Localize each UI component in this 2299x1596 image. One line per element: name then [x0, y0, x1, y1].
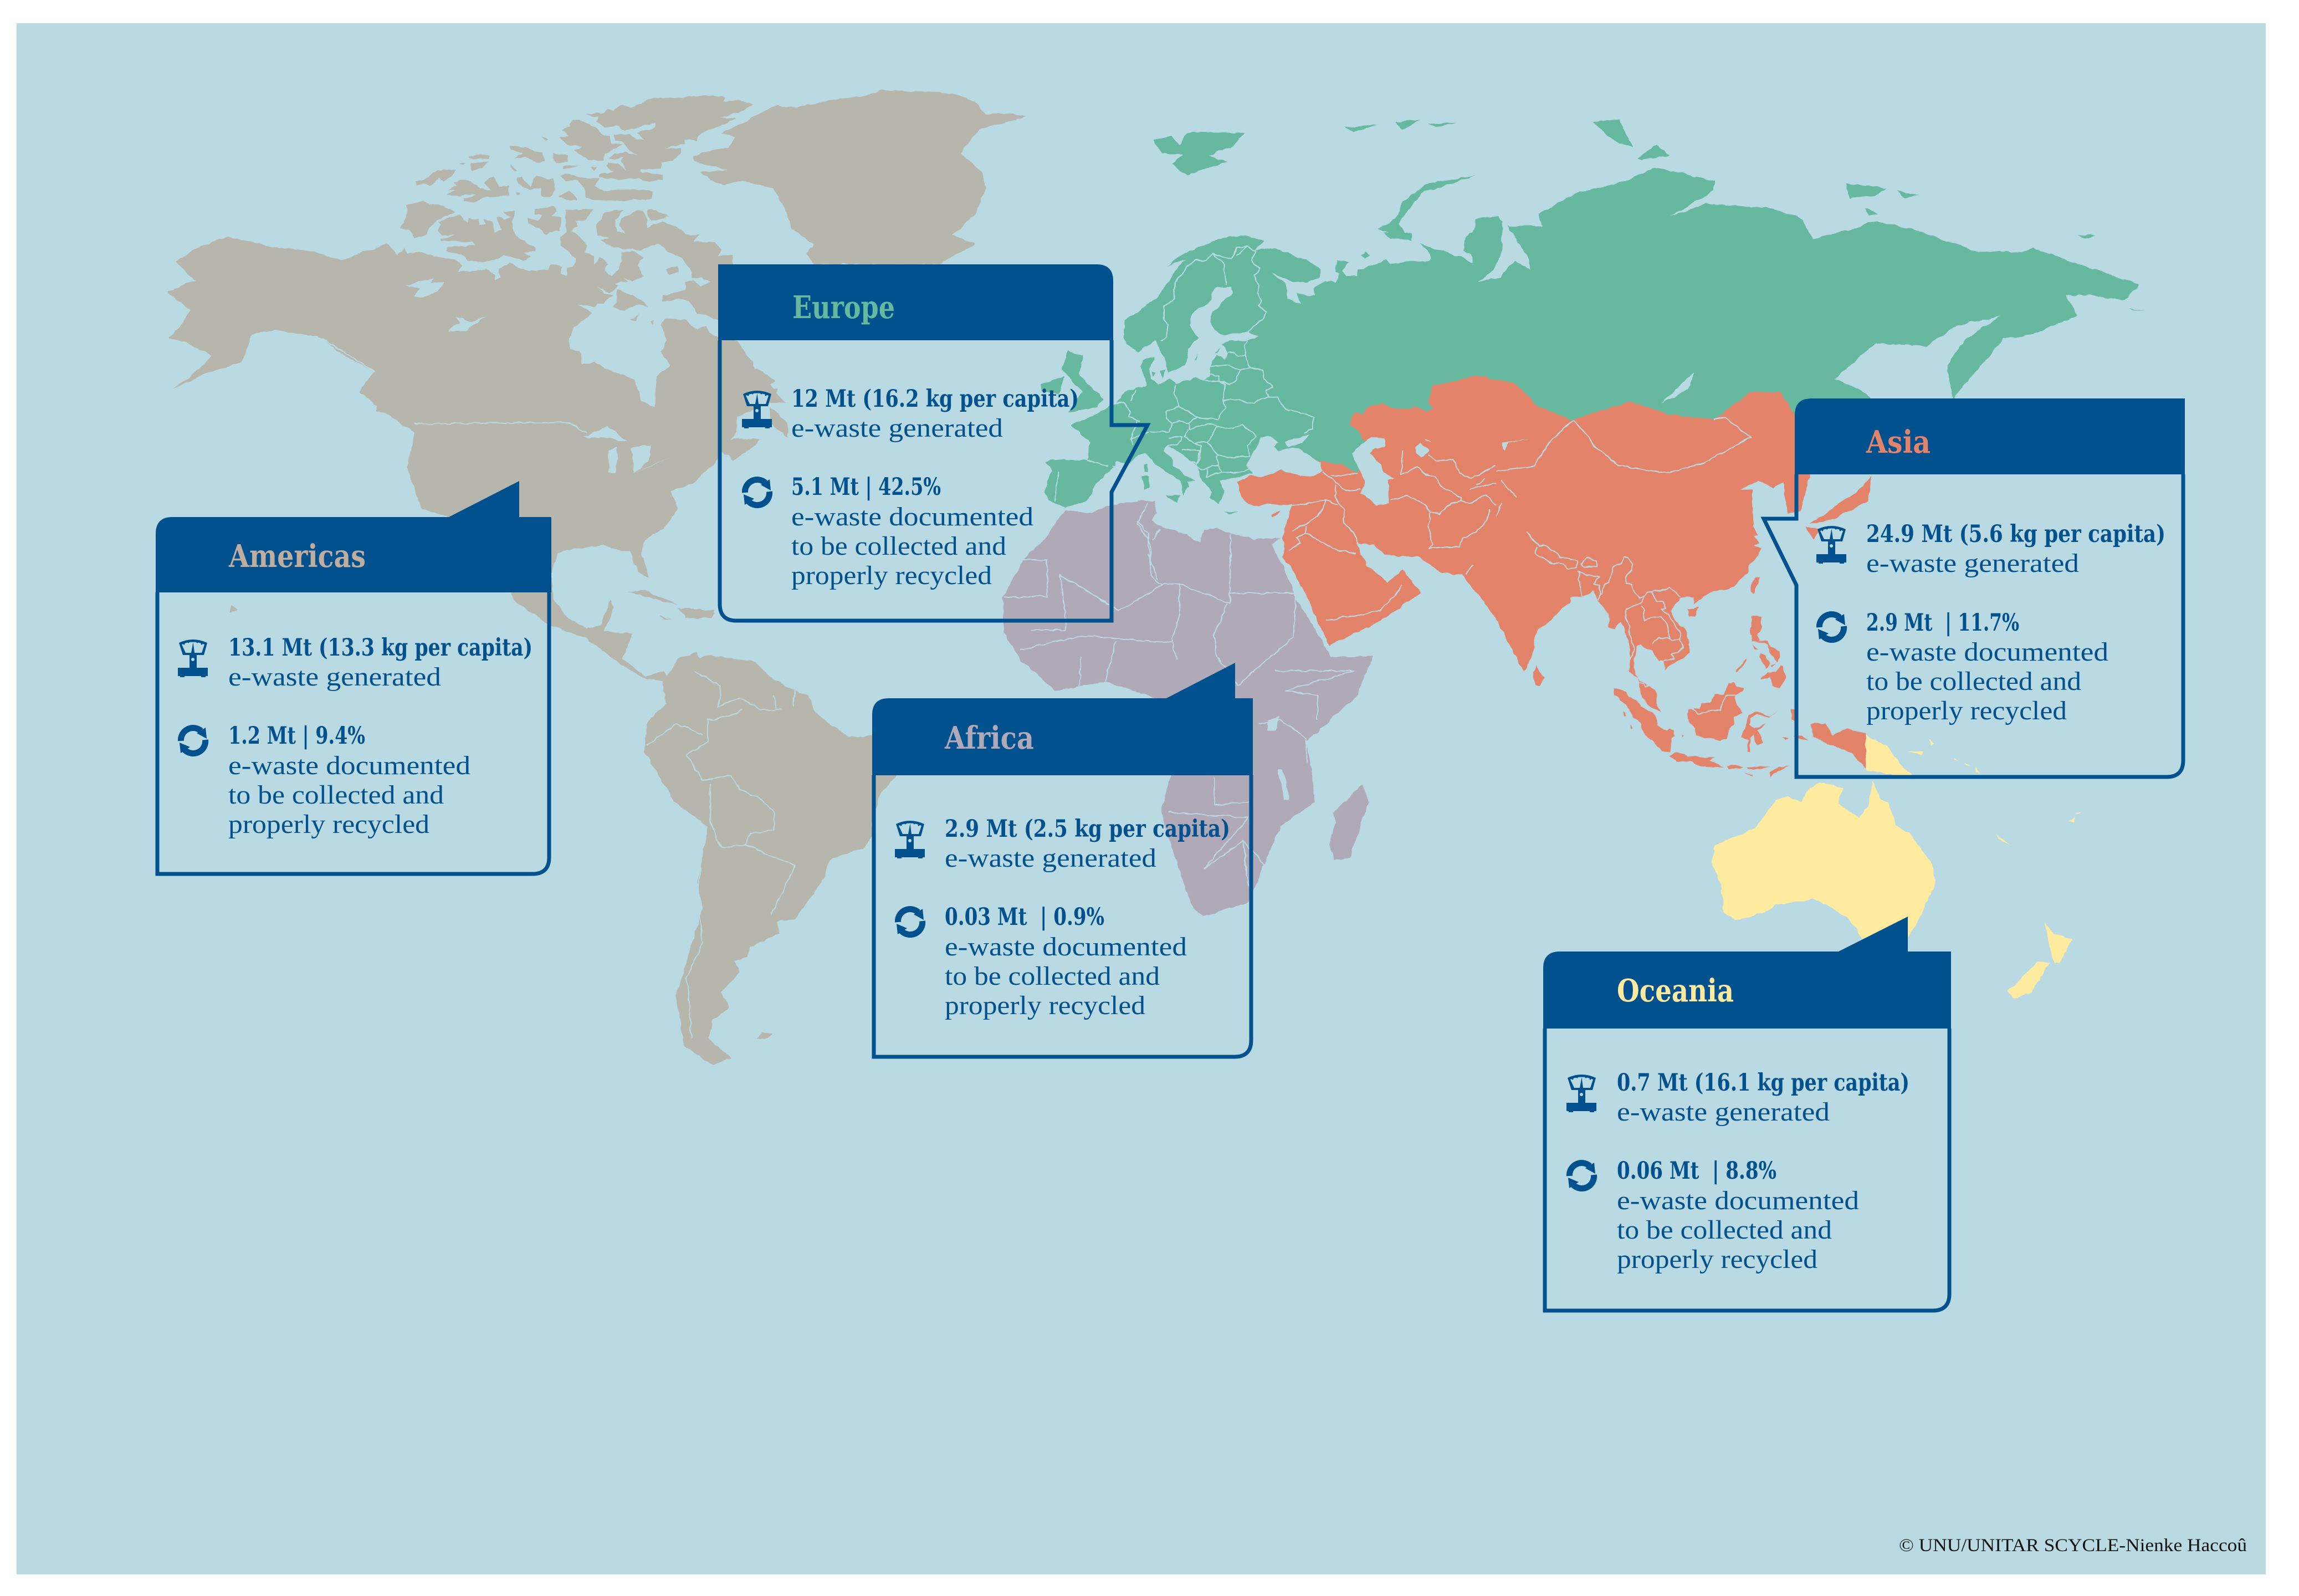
- New Zealand: [2008, 923, 2072, 999]
- panel header: Oceania: [1543, 917, 1951, 1029]
- label: recycled description line 2: to be collected and: [791, 531, 1006, 561]
- Baltic islands: [1151, 349, 1221, 379]
- South American borders: [647, 671, 795, 1039]
- Caspian Sea: [1352, 437, 1395, 507]
- map: Oceania: [1712, 723, 2082, 999]
- Novaya Zemlya: [1377, 176, 1476, 239]
- stat: e-waste generated: 12 Mt (16.2 kg per capita): [791, 385, 1079, 413]
- Great Bear and Great Slave lakes: [406, 279, 488, 331]
- Borneo: [1687, 683, 1744, 741]
- Victoria Island: [437, 211, 535, 262]
- panel outline and pointer: Asia: [1764, 474, 2183, 777]
- map: Europe and Russia: [1041, 120, 2147, 514]
- Sumatra: [1614, 688, 1683, 752]
- Lake Baikal: [1661, 372, 1693, 405]
- Japan: [1806, 475, 1872, 539]
- label: recycled description line 2: to be collected and: [1866, 667, 2081, 696]
- Ellesmere Island: [586, 96, 754, 183]
- Central Asian lakes: [1502, 438, 1531, 450]
- Labrador, Newfoundland, Nova Scotia: [674, 326, 788, 618]
- Melville and neighbouring islands: [417, 170, 577, 202]
- icon: scale: [742, 391, 772, 428]
- Oceanian landmasses: [1712, 735, 2082, 999]
- icon: recycle: [744, 479, 771, 505]
- Central and East Asia: [1282, 375, 1809, 672]
- South and Southeast Asia: [1517, 489, 1808, 777]
- panel: Africa: [872, 663, 1253, 1057]
- Alaska, USA, Mexico and Central America: [167, 237, 737, 682]
- label: recycled description: e-waste documented: [791, 502, 1033, 531]
- Southampton and Hudson Bay islands: [612, 266, 678, 325]
- Russia east of the Urals: [1154, 120, 2147, 458]
- Middle East and Kazakhstan: [1149, 287, 1496, 565]
- Kolguev and Novaya Zemlya tail: [1360, 233, 1411, 259]
- Asian borders: [1289, 417, 1751, 621]
- Great Britain: [1062, 351, 1103, 412]
- stat: e-waste generated: 0.7 Mt (16.1 kg per capita): [1617, 1069, 1909, 1097]
- panel: Oceania: [1543, 917, 1951, 1311]
- Hawaii: [229, 605, 237, 612]
- African continent: [1003, 501, 1373, 917]
- European borders: [1113, 245, 1314, 477]
- Iberian and French borders: [1055, 461, 1114, 501]
- label: recycled description line 2: to be collected and: [228, 780, 444, 810]
- label: recycled description line 2: to be collected and: [945, 961, 1160, 991]
- Central and Eastern Europe with Scandinavia: [1108, 233, 1496, 514]
- label: recycled description line 3: properly recycled: [228, 810, 429, 839]
- label: recycled description: e-waste documented: [1866, 637, 2108, 667]
- map: Asia: [1149, 287, 1872, 777]
- Baltic Sea: [1149, 287, 1258, 385]
- Prince of Wales Island: [528, 206, 562, 236]
- label: e-waste generated: e-waste generated: [791, 413, 1003, 443]
- Ireland: [1041, 377, 1065, 395]
- New Caledonia and Vanuatu: [1996, 812, 2082, 845]
- Java and Lesser Sunda Islands: [1670, 753, 1789, 777]
- North American borders: [322, 338, 700, 452]
- icon: recycle: [1568, 1163, 1595, 1189]
- world map: [167, 90, 2147, 1065]
- panel outline: Oceania: [1545, 1029, 1949, 1311]
- New Siberian Islands: [1846, 183, 1919, 216]
- title: Oceania: Oceania: [1617, 973, 1734, 1009]
- Middle Eastern borders: [1289, 450, 1496, 553]
- Bismarck and Solomon Islands: [1907, 739, 1981, 774]
- label: recycled description: e-waste documented: [1617, 1186, 1859, 1215]
- Caribbean islands: [627, 590, 715, 620]
- Mediterranean islands: [1141, 464, 1238, 514]
- label: recycled description line 3: properly recycled: [945, 991, 1145, 1020]
- Axel Heiberg Island: [560, 120, 622, 160]
- Australia: [1712, 781, 1935, 939]
- Cyprus: [1270, 510, 1281, 516]
- icon: recycle: [180, 728, 207, 754]
- panel outline: Americas: [157, 592, 549, 874]
- Iberia, France and British Isles: [1041, 351, 1120, 508]
- Persian Gulf: [1356, 543, 1438, 582]
- Devon Island: [560, 173, 653, 201]
- Taiwan: [1751, 576, 1760, 594]
- Madagascar: [1329, 784, 1369, 860]
- Southeast Asian borders: [1527, 532, 1735, 714]
- Black Sea and Azov: [1246, 434, 1322, 477]
- Sri Lanka: [1533, 666, 1544, 686]
- Gulf of Ob: [1478, 219, 1529, 282]
- panel: Americas: [156, 481, 551, 874]
- Aral Sea: [1415, 439, 1432, 458]
- stat: recycled: 0.03 Mt | 0.9%: [945, 903, 1104, 931]
- Canadian mainland: [377, 208, 643, 412]
- Canada and Arctic Archipelago: [377, 96, 785, 412]
- icon: recycle: [1818, 614, 1845, 640]
- Falkland Islands: [757, 1032, 774, 1039]
- Philippines: [1735, 616, 1786, 689]
- label: recycled description line 3: properly recycled: [1866, 696, 2067, 725]
- stat: recycled: 2.9 Mt | 11.7%: [1866, 609, 2019, 637]
- Banks Island: [400, 201, 456, 238]
- Greenland: [693, 90, 1027, 264]
- New Guinea west (Asia): [1811, 723, 1866, 769]
- Maghreb and Egypt borders: [1138, 521, 1231, 565]
- Severnaya Zemlya: [1593, 120, 1670, 160]
- Hainan: [1687, 607, 1699, 616]
- panel header: Americas: [156, 481, 551, 592]
- stat: recycled: 0.06 Mt | 8.8%: [1617, 1157, 1776, 1185]
- panel outline: Africa: [874, 775, 1251, 1057]
- Papua New Guinea: [1866, 735, 1917, 778]
- panel header: Europe: [718, 264, 1113, 340]
- title: Asia: Asia: [1866, 424, 1931, 461]
- label: recycled description line 2: to be collected and: [1617, 1215, 1832, 1245]
- Wrangel Island: [2077, 235, 2147, 311]
- panel: Europe: [718, 264, 1148, 621]
- credit: © UNU/UNITAR SCYCLE-Nienke Haccoû: [1899, 1536, 2247, 1556]
- African lakes: [1267, 716, 1290, 800]
- icon: scale: [895, 821, 925, 858]
- map: Africa: [1003, 501, 1373, 917]
- label: recycled description: e-waste documented: [228, 751, 470, 780]
- icon: scale: [1816, 526, 1846, 564]
- label: recycled description line 3: properly recycled: [791, 561, 992, 590]
- Northern Queen Elizabeth Islands: [459, 136, 598, 172]
- North America landmass: [167, 90, 1027, 682]
- panel: Asia: [1764, 398, 2185, 777]
- Quebec: [657, 319, 785, 403]
- Franz Josef Land: [1344, 120, 1456, 132]
- label: e-waste generated: e-waste generated: [1866, 549, 2079, 578]
- label: recycled description: e-waste documented: [945, 932, 1187, 961]
- title: Americas: Americas: [228, 538, 366, 575]
- label: e-waste generated: e-waste generated: [945, 843, 1156, 873]
- South America landmass: [644, 651, 904, 1065]
- Great Lakes: [546, 389, 671, 474]
- label: e-waste generated: e-waste generated: [228, 662, 441, 692]
- stat: e-waste generated: 13.1 Mt (13.3 kg per capita): [228, 634, 532, 662]
- stat: e-waste generated: 24.9 Mt (5.6 kg per capita): [1866, 520, 2165, 548]
- panel outline and pointer: Europe: [720, 340, 1148, 621]
- Baffin Island: [597, 209, 733, 320]
- label: e-waste generated: e-waste generated: [1617, 1097, 1830, 1127]
- Svalbard: [1154, 132, 1245, 176]
- African borders: [1005, 554, 1354, 887]
- stat: recycled: 1.2 Mt | 9.4%: [228, 722, 365, 750]
- Maluku: [1783, 709, 1808, 740]
- title: Europe: Europe: [792, 289, 895, 326]
- North African borders: [1023, 504, 1162, 604]
- label: recycled description line 3: properly recycled: [1617, 1245, 1817, 1274]
- map: Americas: [167, 90, 1027, 1065]
- title: Africa: Africa: [944, 720, 1034, 756]
- icon: recycle: [897, 909, 924, 935]
- icon: scale: [1566, 1075, 1596, 1112]
- stat: recycled: 5.1 Mt | 42.5%: [791, 473, 941, 501]
- Sulawesi: [1742, 711, 1777, 751]
- panel header: Africa: [872, 663, 1253, 775]
- panel header: Asia: [1795, 398, 2185, 474]
- stat: e-waste generated: 2.9 Mt (2.5 kg per capita): [945, 815, 1230, 843]
- icon: scale: [178, 640, 208, 677]
